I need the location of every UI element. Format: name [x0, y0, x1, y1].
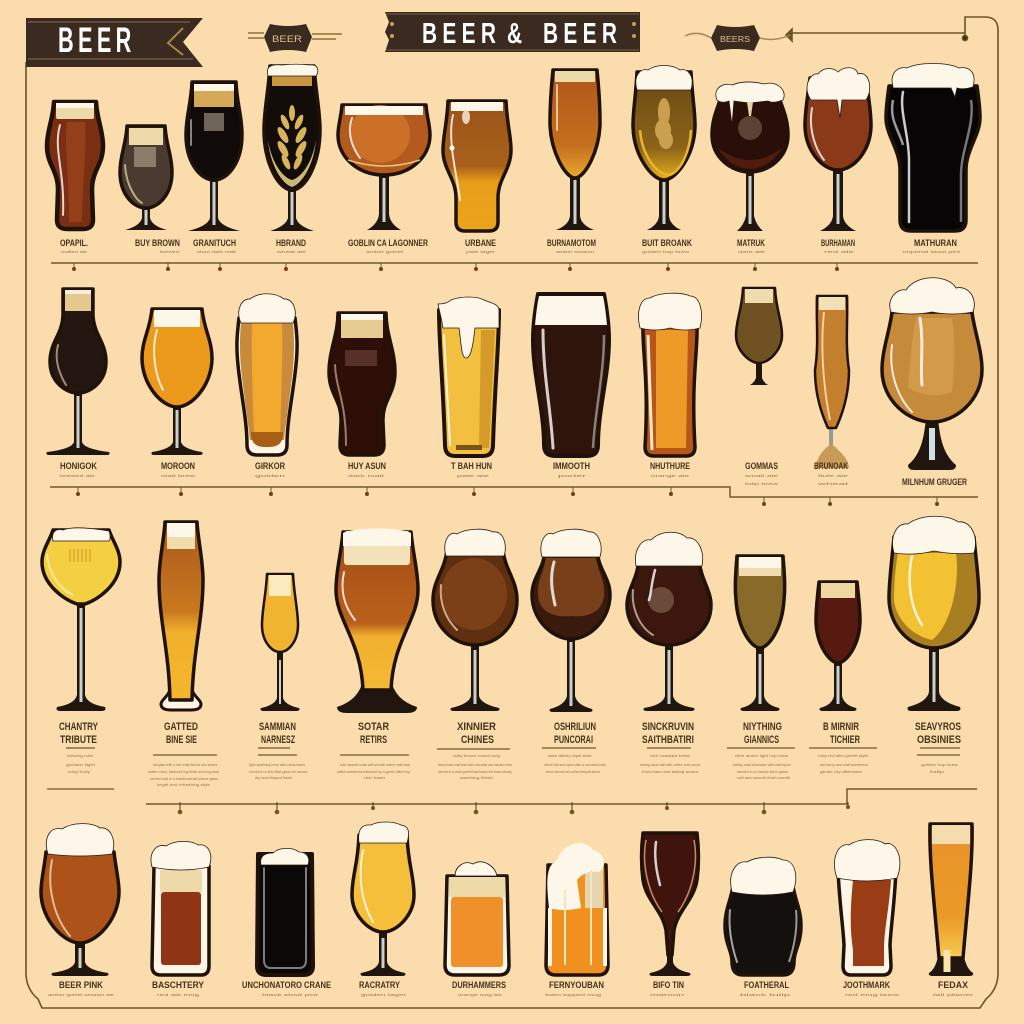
glass: large black pint	[886, 64, 980, 231]
labels: row 1: wheat ale	[277, 249, 307, 254]
glass: dark red goblet	[816, 582, 860, 711]
glass: foam-top red mug	[835, 840, 900, 975]
glass: black tulip pint	[725, 857, 801, 975]
glass: round dark brown goblet	[532, 529, 610, 712]
labels: row 3: served cold in a traditional tall pilsner glass	[150, 776, 218, 781]
labels: row 3: CHANTRY	[59, 721, 98, 733]
labels: row 4: BASCHTERY	[152, 980, 204, 990]
labels: row 1: golden hop brew	[642, 249, 689, 254]
labels: row 2: malt brew	[161, 473, 195, 478]
labels: row 4: FOATHERAL	[744, 980, 789, 990]
labels: row 3: B MIRNIR	[823, 721, 859, 733]
icon: wheat ear	[275, 105, 309, 171]
glass: dark tulip pint	[329, 313, 395, 455]
emblem: right: BEERS	[720, 35, 750, 44]
labels: row 3: toffee sweetness balanced by a gentle bitter hop	[337, 769, 411, 774]
labels: row 4: black stout pint	[262, 992, 320, 997]
glass: wide yellow goblet	[42, 528, 120, 711]
glass: maroon tulip	[642, 833, 698, 976]
labels: row 4: BIFO TIN	[653, 980, 684, 990]
labels: row 3: served in a classic stem glass	[737, 769, 788, 774]
labels: row 1	[60, 238, 962, 254]
labels: row 1: amber session	[556, 249, 594, 254]
labels: row 4: amber goblet session ale	[48, 992, 115, 997]
labels: row 2: HONIGOK	[60, 461, 97, 471]
panel: row 1 glasses	[47, 64, 980, 271]
glass: small tulip on short stem	[736, 288, 782, 385]
glass: black goblet	[186, 82, 242, 231]
banner: left title	[26, 18, 203, 67]
labels: row 2: porter	[558, 473, 588, 478]
labels: row 1: BUIT BROANK	[642, 238, 692, 248]
panel: row 2 glasses	[46, 278, 982, 506]
glass: dark goblet with foam	[712, 82, 788, 231]
labels: row 3: light sparkling brew with citrus tones	[249, 762, 305, 767]
glass: foam-top orange mug	[445, 862, 509, 975]
labels: row 4: black tulip	[740, 992, 792, 997]
labels: row 4: orange mug ale	[458, 992, 503, 997]
labels: row 3: earthy malt character with mild spice	[733, 762, 792, 767]
labels: row 3: PUNCORAI	[554, 734, 593, 746]
glass: orange goblet	[142, 309, 212, 455]
glass: tall black glass with wheat	[264, 64, 320, 231]
labels: row 3: served in a slim flute glass for aroma	[249, 769, 308, 774]
connector line: row 3	[146, 789, 977, 814]
labels: row 3: SEAVYROS	[915, 721, 961, 733]
labels: row 3: NIYTHING	[743, 721, 782, 733]
glass: large dark pint	[533, 294, 609, 456]
labels: row 3: rich foam	[364, 775, 386, 780]
glass: foam-top mug red brown	[151, 841, 211, 975]
labels: row 2: dark malt	[348, 473, 386, 478]
labels: row 3: tall glass with a rich malty flavour and aroma	[153, 762, 218, 767]
glass: dark goblet with foam	[627, 532, 711, 711]
glass: large golden goblet with foam	[889, 516, 979, 711]
labels: row 4: BEER PINK	[59, 980, 103, 990]
labels: row 1: BURNAMOTOM	[547, 238, 596, 248]
panel: row 4 glasses	[41, 822, 974, 997]
glass: small yellow flute	[260, 574, 300, 711]
labels: row 3: deep brown malt brew with chocolate and roasted notes	[438, 762, 512, 767]
labels: row 1: GRANITUCH	[193, 238, 236, 248]
labels: row 2: BRUNOAK	[814, 461, 848, 471]
labels: row 1: pale lager	[466, 249, 496, 254]
glass: tall pilsner	[159, 522, 203, 710]
labels: row 3: BINE SIE	[166, 734, 197, 746]
labels: row 1: GOBLIN CA LAGONNER	[348, 238, 428, 248]
labels: row 4: golden lager	[361, 992, 407, 997]
labels: row 3: SINCKRUVIN	[642, 721, 694, 733]
labels: row 4: tall pilsner	[933, 992, 974, 997]
labels: row 2: brewed ale	[60, 473, 96, 478]
emblem: right	[685, 25, 790, 51]
labels: row 2: small ale	[745, 473, 780, 478]
labels: row 1: MATRUK	[737, 238, 765, 248]
labels: row 2: flute ale	[818, 473, 850, 478]
labels: row 1: BURHAMAN	[821, 238, 855, 248]
labels: row 3: NARNESZ	[261, 734, 295, 746]
labels: row 3: XINNIER	[457, 721, 496, 733]
labels: row 2: T BAH HUN	[451, 461, 492, 471]
labels: row 4: red ale mug	[157, 992, 199, 997]
labels: row 1: malted ale	[61, 249, 88, 254]
connector line: row 2	[50, 487, 978, 506]
labels: row 3: amber colour, balanced hop finish and long head	[148, 769, 219, 774]
glass: yellow goblet	[352, 822, 414, 976]
connector line: row 1	[51, 263, 978, 271]
banner: left title: BEER	[58, 22, 136, 60]
glass: orange pint	[638, 293, 702, 456]
labels: row 3: thick foam and lasting aroma	[642, 769, 699, 774]
labels: row 1: BUY BROWN	[135, 238, 180, 248]
labels: row 3: strong dark malt with coffee and cocoa	[640, 762, 701, 767]
labels: row 3: GATTED	[164, 721, 198, 733]
labels: row 3: olive amber light hop brew	[735, 753, 788, 758]
labels: row 3: served in a wide goblet that keeps the foam steady	[438, 769, 512, 774]
labels: row 4: FEDAX	[938, 980, 968, 990]
glass: yellow pint with foam drip	[438, 297, 499, 456]
labels: row 3: SAITHBATIRI	[642, 734, 694, 746]
labels: row 2: pale ale	[457, 473, 491, 478]
glass: amber goblet with foam	[41, 824, 119, 976]
glass: black pint	[257, 848, 313, 975]
labels: row 2: wheat	[818, 481, 850, 486]
labels: row 4: JOOTHMARK	[843, 980, 890, 990]
labels: row 2: orange ale	[651, 473, 691, 478]
labels: row 2	[60, 461, 967, 487]
labels: row 3	[47, 721, 961, 789]
glass: tall orange pilsner	[929, 824, 973, 976]
labels: row 3: warming finish	[460, 775, 493, 780]
labels: row 3: soft and smooth finish overall	[737, 775, 790, 780]
labels: row 3: golden light	[66, 762, 96, 767]
labels: row 4: foam topped mug	[545, 992, 601, 997]
glass: narrow flute	[815, 296, 849, 468]
labels: row 1: imperial stout pint	[903, 249, 962, 254]
labels: row 3: dark abbey style beer	[548, 753, 593, 758]
glass: large amber goblet with foam	[882, 278, 982, 470]
labels: row 3: crisp body	[68, 769, 90, 774]
labels: row 1: OPAPIL.	[60, 238, 88, 248]
emblem: left: BEER	[272, 34, 303, 44]
glass: large foam orange mug	[546, 843, 608, 975]
labels: row 1: MATHURAN	[914, 238, 957, 248]
labels: row 3: CHINES	[461, 734, 494, 746]
labels: row 3: tart berry and malt sweetness	[820, 762, 868, 767]
labels: row 3: rich roasted brew	[650, 753, 690, 758]
labels: row 3: OBSINIES	[917, 734, 961, 746]
labels: row 4: RACRATRY	[359, 980, 400, 990]
labels: row 3: best served at cellar temperature	[546, 769, 601, 774]
labels: row 2: tulip brew	[745, 481, 778, 486]
glass: amber red tulip pint	[47, 102, 103, 229]
labels: row 4: FERNYOUBAN	[549, 980, 604, 990]
labels: row 3: dried fruit and spice with a rounded body	[544, 762, 606, 767]
banner: centre title: BEER	[422, 18, 501, 50]
labels: row 1: stout dark malt	[197, 249, 237, 254]
labels: row 3: TICHIER	[830, 734, 860, 746]
labels: row 4: red mug brew	[845, 992, 899, 997]
glass: tall golden pint	[237, 294, 297, 455]
glass: big amber tulip on base	[336, 528, 418, 713]
labels: row 4: UNCHONATORO CRANE	[242, 980, 331, 990]
labels: row 1: brewed	[160, 249, 179, 254]
labels: row 3: OSHRILIUN	[554, 721, 596, 733]
glass: olive amber goblet	[735, 556, 785, 711]
banner: centre title: &	[507, 18, 522, 50]
glass: golden goblet with hop	[633, 66, 695, 230]
labels: row 3: TRIBUTE	[60, 734, 97, 746]
panel: row 3 glasses	[42, 516, 979, 814]
labels: row 2: GIRKOR	[255, 461, 285, 471]
labels: row 3: SAMMIAN	[259, 721, 296, 733]
labels: row 3: gentle dry aftertaste	[820, 769, 863, 774]
glass: small dark goblet	[120, 126, 172, 230]
labels: row 2: MOROON	[161, 461, 195, 471]
labels: row 2: MILNHUM GRUGER	[902, 477, 967, 487]
labels: row 2: IMMOOTH	[553, 461, 590, 471]
labels: row 3: tulip	[930, 769, 945, 774]
labels: row 4	[48, 980, 974, 997]
banner: centre title: BEER	[543, 18, 622, 50]
labels: row 3: ruby red slim goblet style	[818, 753, 869, 758]
labels: row 3: GIANNICS	[744, 734, 779, 746]
glass: slim amber goblet	[550, 70, 600, 230]
labels: row 3: nutty brown round body	[453, 753, 500, 758]
labels: row 3: SOTAR	[358, 721, 389, 733]
labels: row 2: NHUTHURE	[650, 461, 690, 471]
labels: row 3: bold caramel notes with smooth amber malt body	[340, 762, 410, 767]
labels: row 2: GOMMAS	[745, 461, 778, 471]
glass: dark tulip goblet	[46, 289, 110, 455]
labels: row 4: DURHAMMERS	[452, 980, 506, 990]
labels: row 2: golden	[255, 473, 285, 478]
labels: row 3: dry and elegant finish	[255, 775, 292, 780]
labels: row 2: HUY ASUN	[348, 461, 386, 471]
labels: row 1: HBRAND	[276, 238, 306, 248]
labels: row 3: RETIRS	[360, 734, 387, 746]
emblem: left	[248, 24, 342, 52]
glass: red amber goblet with foam	[805, 68, 871, 231]
glass: round brown goblet	[433, 529, 517, 711]
labels: row 3: brewing note	[67, 753, 94, 758]
labels: row 4: maroon	[650, 992, 684, 997]
labels: row 1: amber goblet	[366, 249, 404, 254]
labels: row 1: red ale	[824, 249, 856, 254]
labels: row 1: dark ale	[738, 249, 766, 254]
labels: row 1: URBANE	[465, 238, 496, 248]
glass: amber tulip pint	[443, 101, 511, 231]
icon: hop cone	[655, 98, 673, 149]
glass: wide amber goblet	[338, 105, 430, 230]
labels: row 3: bright and refreshing style	[157, 782, 211, 787]
banner: centre title	[385, 12, 640, 52]
labels: row 3: golden hop brew	[921, 762, 958, 767]
